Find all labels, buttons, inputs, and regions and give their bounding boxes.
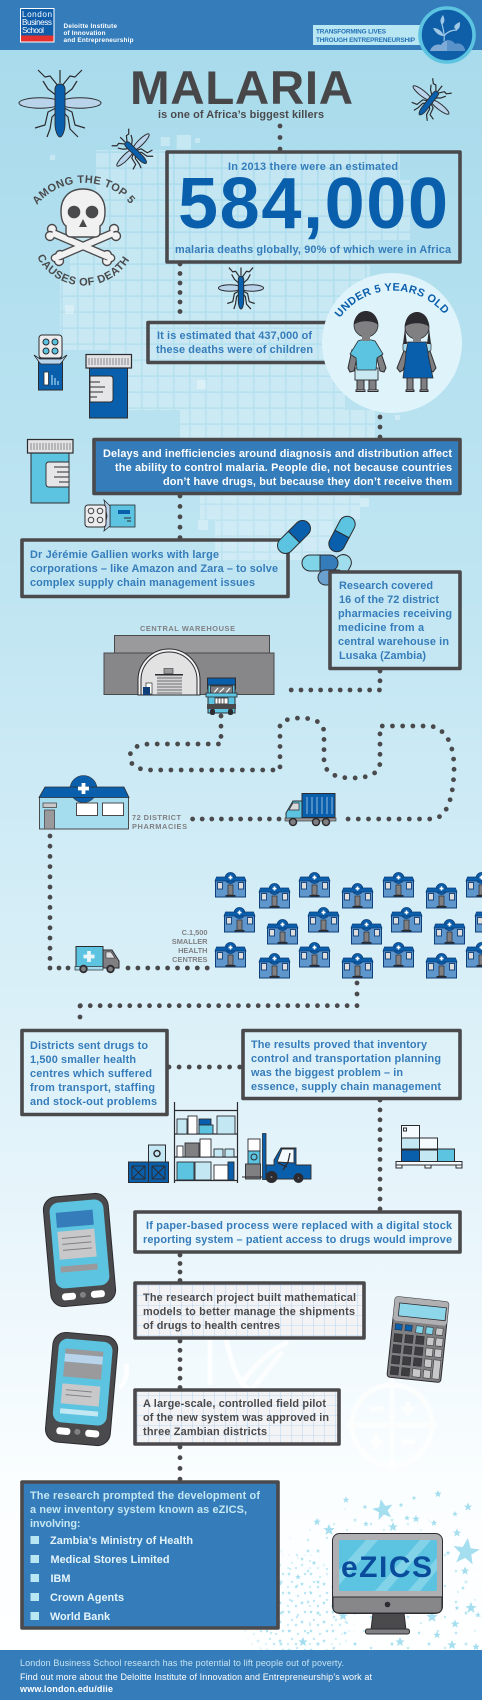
bullet: Medical Stores Limited: Medical Stores Limited	[50, 1554, 170, 1566]
panel: delays and inefficiencies: Delays and inefficiencies around diagnosis and distribution affect	[103, 448, 452, 460]
panel: results: was the biggest problem – in	[250, 1067, 403, 1079]
arc text: UNDER 5 YEARS OLD	[334, 283, 448, 316]
panel: delays and inefficiencies: the ability to control malaria. People die, not because countries	[115, 462, 452, 474]
icon: stacked crates	[128, 1145, 168, 1182]
panel: mathematical models: The research project built mathematical	[143, 1292, 356, 1304]
icon: truck front	[206, 678, 237, 715]
London Business School logo: London	[22, 10, 52, 19]
title: MALARIA	[130, 62, 353, 115]
smaller health centres label	[172, 928, 208, 964]
panel: children deaths: It is estimated that 437,000 of	[157, 330, 312, 342]
connector dots: figure to children	[178, 264, 182, 321]
panel: field pilot: A large-scale, controlled field pilot	[143, 1398, 326, 1410]
district pharmacies label: 72 DISTRICT	[132, 813, 181, 822]
icon: capsules	[274, 513, 358, 585]
institute name: of Innovation	[64, 30, 106, 37]
arc text: causes of death: CAUSES OF DEATH	[38, 254, 130, 286]
icon: crossbones	[46, 224, 120, 266]
top five causes badge	[34, 175, 136, 286]
panel: research covered: pharmacies receiving	[338, 608, 452, 620]
panel: research covered	[330, 572, 460, 668]
institute name: Deloitte Institute	[64, 23, 117, 30]
icon: district pharmacy	[39, 776, 129, 829]
panel: districts sent drugs: Districts sent drugs to	[30, 1040, 148, 1052]
icon: mosquito top right	[402, 72, 460, 129]
panel: districts sent drugs: and stock-out problems	[30, 1096, 157, 1108]
panel: eZICS partners: The research prompted the development of	[30, 1490, 260, 1502]
icon: mosquito centre	[218, 268, 264, 309]
icon: mosquito left of figure box	[104, 121, 162, 179]
panel: mathematical models	[135, 1283, 364, 1338]
connector dots: children circle to delays box	[378, 417, 382, 438]
monitor text: eZICS	[341, 1551, 432, 1584]
panel: field pilot: three Zambian districts	[143, 1426, 267, 1438]
panel: research covered: 16 of the 72 district	[339, 594, 439, 606]
smaller health centres label: C.1,500	[182, 928, 208, 937]
smaller health centres label: CENTRES	[172, 955, 208, 964]
panel: Dr Gallien: Dr Jérémie Gallien works with large	[30, 549, 219, 561]
central warehouse label: CENTRAL WAREHOUSE	[140, 624, 235, 633]
header band	[0, 0, 482, 62]
panel: results: The results proved that inventory	[251, 1039, 427, 1051]
icon: skull	[61, 189, 105, 237]
bullet: IBM: IBM	[50, 1573, 70, 1585]
panel: Dr Gallien: corporations – like Amazon and Zara – to solve	[30, 563, 278, 575]
intro line: In 2013 there were an estimated	[228, 161, 398, 173]
icon: calculator	[387, 1296, 449, 1383]
background map of squares	[50, 135, 410, 560]
panel: results: control and transportation planning	[251, 1053, 441, 1065]
London Business School logo: Business	[22, 18, 52, 27]
icon: dark blue medicine bottle	[86, 354, 132, 418]
panel: Dr Gallien	[22, 540, 288, 596]
icon: medical van	[75, 946, 119, 972]
icon: forklift	[242, 1134, 311, 1182]
bullet: Crown Agents: Crown Agents	[50, 1592, 124, 1604]
London Business School logo: School	[22, 26, 44, 35]
panel: mathematical models: models to better manage the shipments	[143, 1306, 355, 1318]
panel: field pilot	[135, 1390, 339, 1444]
district pharmacies label: PHARMACIES	[132, 822, 187, 831]
delivery route dotted path	[50, 671, 454, 1480]
footer band: London Business School research has the potential to lift people out of poverty.	[20, 1658, 344, 1668]
panel: research covered: Research covered	[339, 580, 433, 592]
circle: under 5 years old	[322, 273, 462, 413]
footer band	[0, 1650, 482, 1700]
bullet: IBM	[30, 1573, 70, 1585]
panel: digital stock reporting: If paper-based process were replaced with a digital stock	[146, 1220, 453, 1232]
panel: districts sent drugs	[22, 1030, 167, 1114]
bullet: Zambia's Ministry of Health: Zambia’s Ministry of Health	[50, 1535, 193, 1547]
background maths drawing	[120, 1338, 437, 1472]
panel: districts sent drugs: 1,500 smaller health	[30, 1054, 136, 1066]
panel: Dr Gallien: complex supply chain management issues	[30, 577, 255, 589]
icon: blue container truck	[285, 794, 336, 826]
smaller health centres label: SMALLER	[172, 937, 208, 946]
panel: children deaths: these deaths were of children	[156, 344, 313, 356]
panel: field pilot: of the new system was approved in	[143, 1412, 329, 1424]
district pharmacies label	[132, 813, 187, 831]
icon: boy	[348, 311, 386, 392]
icon: central warehouse	[104, 636, 274, 695]
connector dots: delays to Dr Gallien	[178, 496, 182, 538]
subtitle: is one of Africa’s biggest killers	[158, 109, 324, 121]
panel: 584,000 deaths	[167, 152, 460, 262]
footer band: Find out more about the Deloitte Institute of Innovation and Entrepreneurship’s work at	[20, 1672, 372, 1682]
panel: children deaths	[148, 322, 338, 362]
icon: large mosquito	[19, 70, 101, 137]
strapline: THROUGH ENTREPRENEURSHIP	[316, 37, 416, 44]
smaller health centres label: HEALTH	[178, 946, 208, 955]
panel: eZICS partners	[22, 1482, 278, 1628]
icon: phone one	[42, 1192, 117, 1308]
icon: girl	[397, 312, 436, 392]
panel: mathematical models: of drugs to health centres	[143, 1320, 280, 1332]
arc text: among the top 5: AMONG THE TOP 5	[34, 175, 136, 205]
panel: districts sent drugs: centres which suffered	[30, 1068, 152, 1080]
panel: districts sent drugs: from transport, staffing	[30, 1082, 155, 1094]
icon: blister pack sideways	[85, 500, 135, 531]
footer band: www.london.edu/diie	[19, 1684, 113, 1694]
panel: research covered: central warehouse in	[338, 636, 449, 648]
panel: eZICS partners: a new inventory system known as eZICS,	[30, 1504, 247, 1516]
icon: warehouse shelving	[174, 1102, 238, 1183]
big number: 584,000	[178, 164, 448, 244]
panel: eZICS partners: involving:	[30, 1518, 80, 1530]
connector dots: title to figure	[278, 126, 282, 150]
icons: grid of health centres	[215, 872, 482, 978]
panel: results: essence, supply chain management	[251, 1081, 441, 1093]
icon: light blue medicine bottle	[28, 440, 73, 503]
icon: plant badge	[420, 8, 474, 62]
panel: delays and inefficiencies: don’t have drugs, but because they don’t receive them	[163, 476, 452, 488]
icon: eZICS monitor	[332, 1534, 442, 1634]
institute name	[64, 23, 134, 44]
panel: research covered: Lusaka (Zambia)	[339, 650, 426, 662]
London Business School logo	[20, 8, 54, 42]
strapline: TRANSFORMING LIVES	[316, 28, 387, 36]
icon: phone two	[44, 1331, 119, 1447]
panel: results	[243, 1030, 460, 1098]
panel: research covered: medicine from a	[338, 622, 425, 634]
strapline	[313, 25, 425, 45]
icon: blister pack and box	[34, 335, 67, 390]
closing line: malaria deaths globally, 90% of which were in Africa	[175, 244, 452, 256]
panel: digital stock reporting	[135, 1212, 460, 1252]
stars scatter	[244, 1490, 482, 1650]
panel: digital stock reporting: reporting system – patient access to drugs would improve	[143, 1234, 452, 1246]
bullet: World Bank: World Bank	[50, 1611, 111, 1623]
institute name: and Entrepreneurship	[64, 37, 134, 44]
panel: delays and inefficiencies	[94, 440, 460, 494]
icon: boxes on pallet	[396, 1126, 462, 1168]
